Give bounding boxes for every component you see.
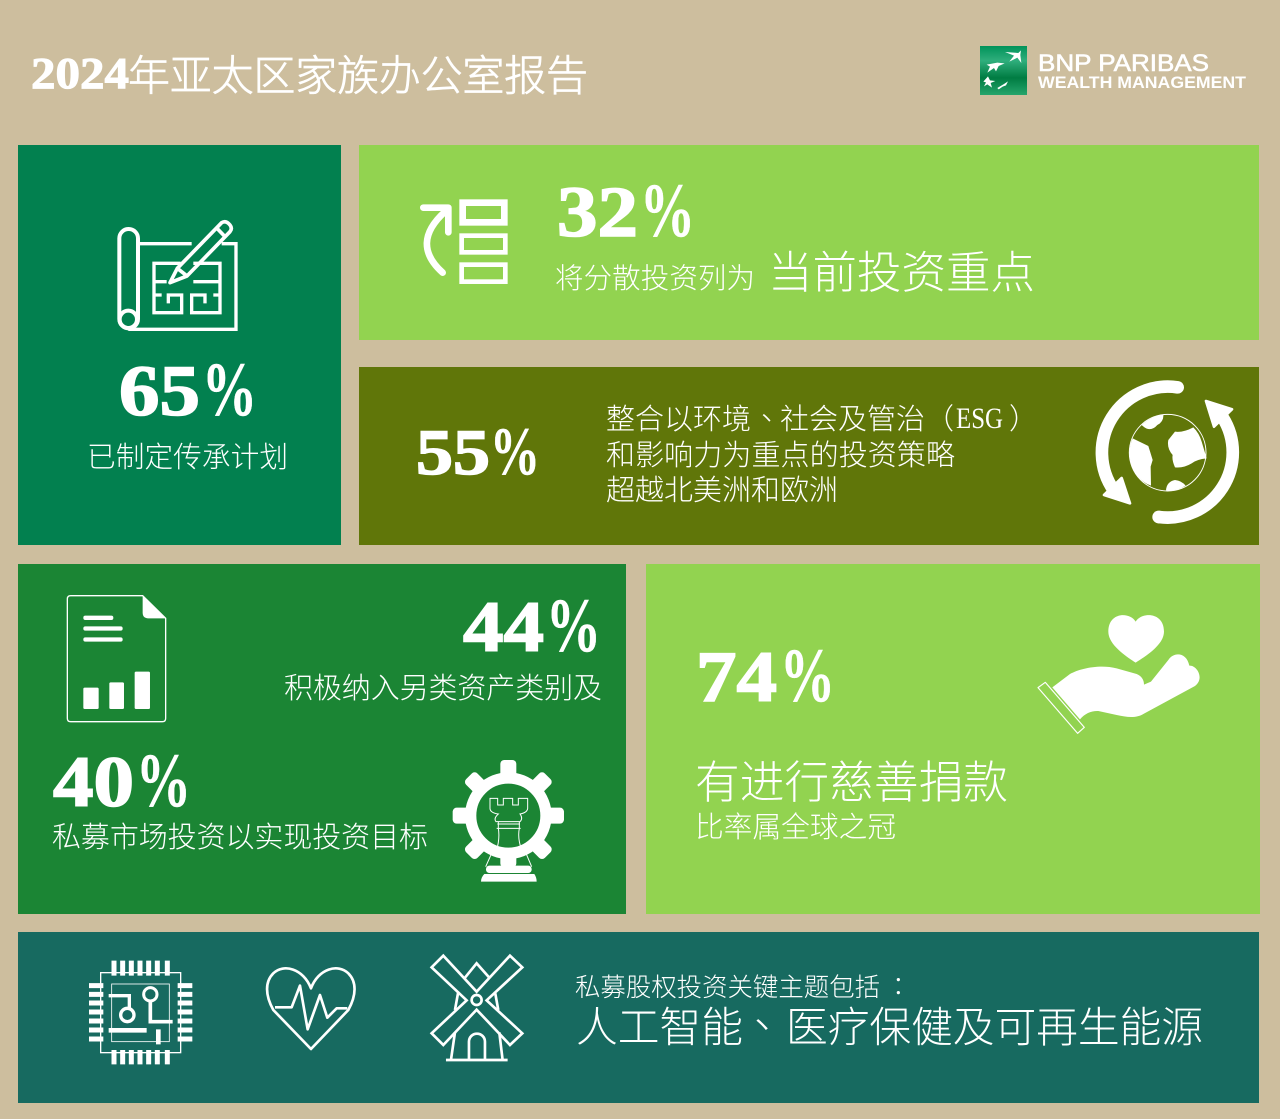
text: ESG description: 整合以环境 [606, 403, 751, 436]
icon: windmill [432, 956, 522, 1060]
text: diversification label: 当前投资重点 [768, 249, 1035, 298]
statistic: 74% [696, 634, 835, 718]
text: themes list: 人工智能 [576, 1004, 743, 1051]
icon: rearranged list [423, 203, 505, 282]
text: themes intro: ： [892, 972, 917, 1000]
icon: microchip [89, 961, 192, 1064]
text: ESG description: 超越北美洲和欧洲 [606, 474, 838, 507]
title: 年亚太区家族办公室报告 [128, 52, 588, 100]
statistic: 74%: 74 [696, 637, 777, 717]
panel: alternatives and private markets [18, 564, 626, 914]
panel: private equity themes [18, 932, 1259, 1103]
statistic: 44% [463, 584, 601, 668]
statistic: 44%: % [546, 584, 601, 668]
statistic: 55% [416, 413, 540, 489]
text: ESG description [606, 395, 1038, 507]
text: diversification label [555, 249, 1035, 298]
logo: BNP Paribas Wealth Management: WEALTH MANAGEMENT [1038, 74, 1246, 92]
statistic: 65% [119, 348, 257, 432]
text: ESG description: ） [1009, 404, 1038, 436]
statistic: 40%: % [136, 739, 191, 823]
text: ESG description: 、 [761, 395, 790, 427]
panel: diversification [359, 145, 1259, 340]
text: succession label: 已制定传承计划 [87, 442, 288, 474]
text: ESG description: ESG [956, 402, 1003, 435]
icon: heart with pulse [267, 968, 355, 1049]
statistic: 32% [557, 169, 695, 253]
logo: BNP Paribas Wealth Management [980, 46, 1246, 95]
logo: BNP Paribas Wealth Management: BNP PARIBAS [1038, 50, 1209, 77]
icon: report document [67, 596, 166, 722]
statistic: 44%: 44 [463, 587, 544, 667]
statistic: 55%: % [490, 413, 540, 489]
statistic: 65%: % [202, 348, 257, 432]
statistic: 32%: % [640, 169, 695, 253]
statistic: 65%: 65 [119, 351, 200, 431]
text: philanthropy subheading: 比率属全球之冠 [695, 812, 896, 844]
icon: gear and rook [453, 760, 564, 882]
statistic: 40%: 40 [53, 742, 134, 822]
text: diversification label: 将分散投资列为 [555, 263, 755, 295]
text: themes list [576, 990, 1203, 1051]
statistic: 32%: 32 [557, 172, 638, 252]
panel: ESG [359, 367, 1259, 545]
icon: blueprint and pencil [119, 222, 236, 329]
statistic: 40% [53, 739, 191, 823]
text: alternatives label: 积极纳入另类资产类别及 [284, 672, 602, 705]
text: ESG description: 和影响力为重点的投资策略 [606, 439, 955, 472]
text: ESG description: 社会及管治 [780, 403, 925, 436]
text: ESG description: （ [925, 404, 954, 436]
text: themes intro: 私募股权投资关键主题包括 [575, 974, 880, 1002]
statistic: 55%: 55 [416, 417, 490, 489]
text: themes list: 、 [754, 990, 796, 1037]
icon: hand holding heart [1038, 615, 1200, 733]
text: philanthropy heading: 有进行慈善捐款 [695, 759, 1008, 808]
panel: philanthropy [646, 564, 1260, 914]
text: private markets label: 私募市场投资以实现投资目标 [52, 821, 428, 854]
title: 2024 [31, 49, 129, 98]
statistic: 74%: % [780, 634, 835, 718]
text: themes list: 医疗保健及可再生能源 [786, 1004, 1203, 1051]
icon: rotating globe [1102, 387, 1233, 518]
panel: succession planning [18, 145, 341, 545]
